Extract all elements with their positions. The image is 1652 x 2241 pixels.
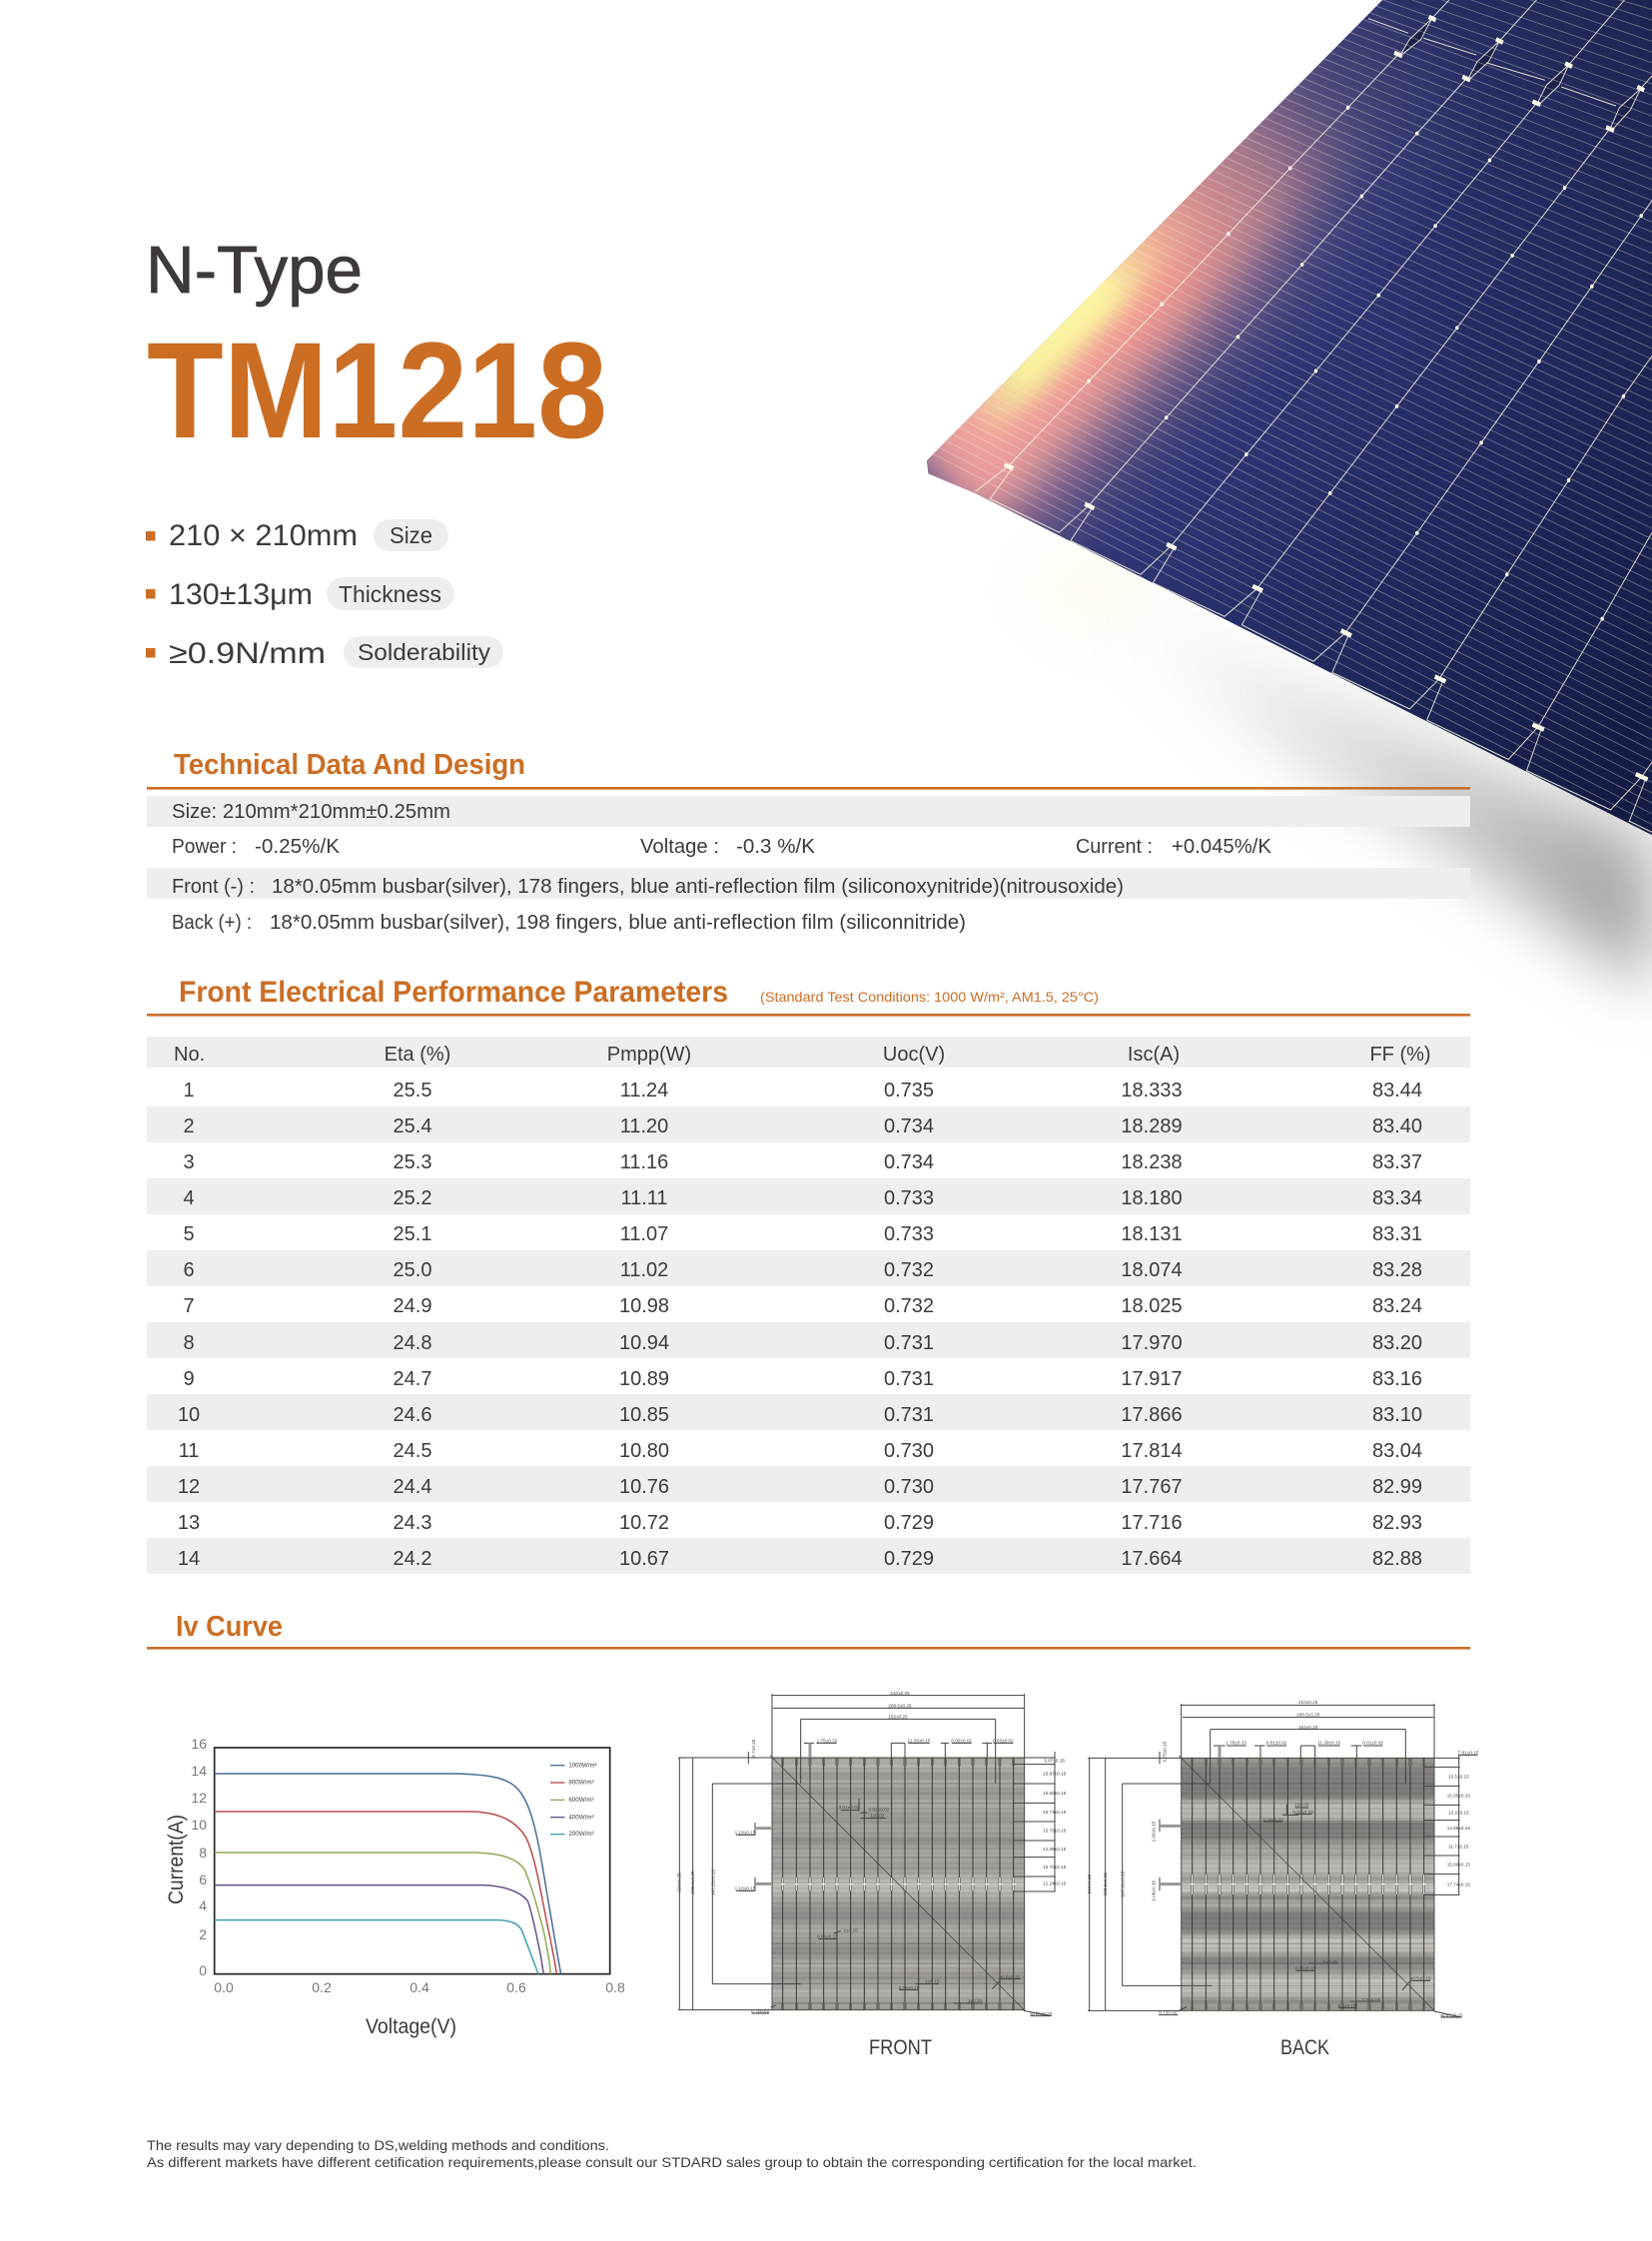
row 4: 0.733 [884, 1187, 934, 1209]
row 11: 10.80 [619, 1440, 669, 1462]
row 3: 3 [183, 1151, 195, 1173]
row 12: 17.767 [1121, 1476, 1183, 1498]
dimension labels: 12.24±0.15 [1043, 1881, 1067, 1886]
row 5: 25.1 [394, 1223, 431, 1245]
legend [550, 1762, 597, 1838]
row 14: 82.88 [1372, 1548, 1422, 1570]
dimension labels: 13.95±0.15 [1447, 1826, 1470, 1831]
row 12: 24.4 [394, 1476, 431, 1498]
row 11: 83.04 [1372, 1440, 1422, 1462]
table header: No. [174, 1044, 205, 1066]
row 13 [178, 1512, 1422, 1534]
dimension labels: 1±0.15 [968, 1998, 983, 2003]
dimension labels: 210±0.25 [890, 1691, 910, 1696]
row 6: 25.0 [394, 1259, 431, 1281]
dimension labels: 210±0.25 [1298, 1700, 1318, 1705]
row 10: 10 [178, 1404, 200, 1426]
dimension labels: 5.87±0.15 [1044, 1759, 1065, 1764]
dimension labels: 0.03±0.02 [993, 1738, 1014, 1743]
dimension labels: 147.25±0.25 [710, 1869, 715, 1895]
dimension labels: 0.02±0.02 [951, 1738, 972, 1743]
dimension labels: 0.04±0.02 [1262, 1817, 1283, 1822]
technical data rows [147, 796, 1470, 934]
dimension labels: 15.70±0.15 [1043, 1829, 1067, 1834]
dimension labels: 15.70±0.15 [1043, 1865, 1067, 1869]
table header: Eta (%) [385, 1044, 450, 1066]
row 12: 82.99 [1372, 1476, 1422, 1498]
row 3: 0.734 [884, 1151, 934, 1173]
dimension labels: 210±0.25 [1087, 1874, 1092, 1893]
y axis ticks: 8 [199, 1845, 207, 1861]
row 9: 83.16 [1372, 1368, 1422, 1390]
row 14: 17.664 [1121, 1548, 1183, 1570]
dimension labels: 3.01±0.02 [839, 1805, 860, 1810]
row 2: 0.734 [884, 1116, 934, 1137]
electrical parameters table [147, 1037, 1470, 1574]
row: size [147, 796, 1470, 827]
title: N-Type: N-Type [146, 233, 363, 308]
row: front: 18*0.05mm busbar(silver), 178 fingers, blue anti-reflection film (siliconoxynitride)(nitrousoxide) [272, 876, 1124, 898]
spec: thickness: Thickness [339, 581, 441, 607]
row: front [147, 868, 1470, 899]
row 9: 9 [183, 1368, 195, 1390]
row 9: 17.917 [1121, 1368, 1183, 1390]
row 5: 11.07 [620, 1223, 668, 1245]
table header: Isc(A) [1128, 1044, 1180, 1066]
table header: Uoc(V) [883, 1044, 945, 1066]
row 9: 24.7 [394, 1368, 431, 1390]
dimension labels: 1.76±0.15 [1226, 1741, 1246, 1746]
dimension labels: 0.7±0.25 [751, 1739, 756, 1758]
row 1 [183, 1080, 1422, 1102]
row: temperature coefficients: -0.25%/K [255, 836, 341, 858]
dimension labels: 208.6±0.25 [690, 1870, 695, 1894]
dimension labels: 0.03±0.02 [1292, 1810, 1313, 1815]
dimension labels: 12.2±0.15 [1448, 1810, 1469, 1815]
row 14: 14 [178, 1548, 200, 1570]
spec: solderability: Solderability [358, 639, 491, 665]
dimension labels: 15.60±0.15 [1043, 1791, 1067, 1796]
row: back: 18*0.05mm busbar(silver), 198 fingers, blue anti-reflection film (siliconnitride) [270, 912, 966, 934]
row 7: 83.24 [1372, 1295, 1422, 1317]
row 9: 10.89 [619, 1368, 669, 1390]
table header [174, 1044, 1431, 1066]
row 3: 83.37 [1372, 1151, 1422, 1173]
row 5: 0.733 [884, 1223, 934, 1245]
dimension labels: ø295±0.25 [1440, 2012, 1463, 2017]
y axis ticks: 4 [199, 1897, 207, 1913]
row: temperature coefficients: Power : [172, 836, 237, 858]
x axis ticks [214, 1979, 625, 1995]
section heading: iv curve: Iv Curve [176, 1611, 283, 1643]
legend: 200W/m² [568, 1831, 594, 1838]
row 7: 7 [183, 1295, 195, 1317]
row 6 [183, 1259, 1422, 1281]
row 3 [183, 1151, 1422, 1173]
row 11: 17.814 [1121, 1440, 1183, 1462]
dimension labels: 1.2±0.15 [1362, 1997, 1380, 2002]
row 8: 24.8 [394, 1332, 431, 1354]
dimension labels: ø295±0.25 [1030, 2011, 1053, 2016]
row 5: 83.31 [1372, 1223, 1422, 1245]
row 8 [183, 1332, 1422, 1354]
spec: solderability: ≥0.9N/mm [169, 637, 326, 670]
dimension lines [678, 1694, 1056, 2016]
row: back: Back (+) : [172, 912, 252, 934]
dimension labels: 167.23±0.25 [1120, 1870, 1125, 1897]
dimension labels: 1±0.15 [1323, 1959, 1337, 1964]
solar panel photo [879, 0, 1652, 989]
dimension labels: 1.18±0.15 [735, 1885, 756, 1890]
dimension labels: 1±0.15 [925, 1979, 940, 1984]
row 8: 10.94 [619, 1332, 669, 1354]
dimension labels: 0.7±0.02 [1159, 2010, 1178, 2015]
dimension lines [1088, 1704, 1477, 2017]
row: temperature coefficients: +0.045%/K [1172, 836, 1272, 858]
legend: 400W/m² [568, 1814, 594, 1821]
cell face [770, 1756, 1026, 2011]
row: temperature coefficients: Current : [1076, 836, 1153, 858]
row 9: 0.731 [884, 1368, 934, 1390]
legend: 1000W/m² [568, 1762, 597, 1769]
row 4: 4 [183, 1187, 195, 1209]
y axis ticks: 10 [191, 1817, 207, 1833]
y axis ticks: 12 [191, 1790, 207, 1806]
row 8: 0.731 [884, 1332, 934, 1354]
drawing: front dimensions [677, 1691, 1067, 2016]
dimension labels: 11.7±0.15 [1448, 1844, 1469, 1849]
row 13: 17.716 [1121, 1512, 1183, 1534]
dimension labels [677, 1691, 1067, 2016]
table header: Pmpp(W) [607, 1044, 691, 1066]
dimension labels: ø0.5±0.15 [1410, 1975, 1431, 1980]
footnote [147, 2137, 1197, 2170]
row 14: 24.2 [394, 1548, 431, 1570]
dimension labels: 0.81±0.02 [1266, 1741, 1287, 1746]
row 7: 0.732 [884, 1295, 934, 1317]
row 4: 11.11 [620, 1187, 668, 1209]
row 4: 18.180 [1121, 1187, 1183, 1209]
row 13: 82.93 [1372, 1512, 1422, 1534]
x axis ticks: 0.6 [506, 1979, 526, 1995]
label: front: FRONT [869, 2036, 932, 2059]
y axis ticks: 14 [191, 1763, 207, 1779]
row 14 [178, 1548, 1422, 1570]
title: TM1218: TM1218 [147, 315, 607, 467]
row 11: 11 [179, 1440, 199, 1462]
dimension labels [1087, 1700, 1479, 2017]
dimension labels: 208.5±0.25 [888, 1704, 912, 1709]
y axis ticks [191, 1736, 207, 1978]
row 8: 8 [183, 1332, 195, 1354]
row 12 [178, 1476, 1422, 1498]
row 7: 18.025 [1121, 1295, 1183, 1317]
dimension labels: 1.06±0.15 [1151, 1880, 1156, 1901]
row 10: 24.6 [394, 1404, 431, 1426]
row 2: 2 [183, 1116, 195, 1137]
row 13: 13 [178, 1512, 200, 1534]
dimension labels: 0.7±0.02 [751, 2008, 769, 2013]
row 4: 83.34 [1372, 1187, 1422, 1209]
row 1: 0.735 [884, 1080, 934, 1102]
row 2: 18.289 [1121, 1116, 1183, 1137]
dimension labels: 0.01±0.02 [1362, 1741, 1383, 1746]
row 7 [183, 1295, 1422, 1317]
row 3: 25.3 [394, 1151, 431, 1173]
section heading: electrical parameters: (Standard Test Conditions: 1000 W/m², AM1.5, 25°C) [760, 989, 1099, 1005]
legend: 800W/m² [568, 1780, 594, 1787]
axis title: current: Current(A) [165, 1815, 188, 1904]
dimension labels: 0.75±0.15 [1162, 1741, 1167, 1762]
x axis ticks: 0.0 [214, 1979, 234, 1995]
row 5: 5 [183, 1223, 195, 1245]
row 14: 10.67 [619, 1548, 669, 1570]
row 10: 0.731 [884, 1404, 934, 1426]
dimension labels: 1±0.15 [844, 1927, 858, 1932]
dimension labels: 0.06±0.15 [817, 1933, 838, 1938]
table header: FF (%) [1369, 1044, 1431, 1066]
row 2: 83.40 [1372, 1116, 1422, 1137]
dimension labels: 1.75±0.15 [817, 1738, 838, 1743]
row 12: 0.730 [884, 1476, 934, 1498]
row 7: 10.98 [619, 1295, 669, 1317]
y axis ticks: 2 [199, 1926, 207, 1942]
dimension labels: 15.5±0.15 [1448, 1774, 1469, 1779]
row 1: 1 [183, 1080, 195, 1102]
panel drop shadow [1024, 539, 1652, 989]
section heading: technical data: Technical Data And Design [174, 749, 525, 781]
x axis ticks: 0.2 [312, 1979, 332, 1995]
dimension labels: 15.00±0.15 [1447, 1863, 1470, 1868]
row 13: 0.729 [884, 1512, 934, 1534]
row 1: 83.44 [1372, 1080, 1422, 1102]
row 5: 18.131 [1121, 1223, 1183, 1245]
footnote: The results may vary depending to DS,welding methods and conditions. [147, 2137, 609, 2153]
row 6: 18.074 [1121, 1259, 1183, 1281]
spec: thickness: 130±13μm [169, 578, 313, 611]
footnote: As different markets have different cetification requirements,please consult our STDARD sales group to obtain the corresponding certification for the local market. [147, 2154, 1197, 2170]
dimension labels: 208.5±0.25 [1296, 1712, 1320, 1717]
row 11 [179, 1440, 1422, 1462]
dimension labels: 11.29±0.15 [1317, 1741, 1341, 1746]
row 6: 0.732 [884, 1259, 934, 1281]
chart: IV curve [165, 1736, 625, 2038]
dimension labels: 15.73±0.15 [1043, 1810, 1067, 1815]
dimension labels: 162±0.25 [888, 1715, 908, 1720]
y axis ticks: 6 [199, 1871, 207, 1887]
dimension labels: 14.09±0.15 [1043, 1847, 1067, 1852]
dimension labels: 11.29±0.15 [908, 1738, 931, 1743]
row 3: 18.238 [1121, 1151, 1183, 1173]
row 10: 17.866 [1121, 1404, 1183, 1426]
row 2: 11.20 [620, 1116, 668, 1137]
label: back: BACK [1280, 2036, 1329, 2059]
legend: 600W/m² [568, 1797, 594, 1804]
row 11: 0.730 [884, 1440, 934, 1462]
row 2: 25.4 [394, 1116, 431, 1137]
row 8: 17.970 [1121, 1332, 1183, 1354]
row 5 [183, 1223, 1422, 1245]
x axis ticks: 0.4 [410, 1979, 429, 1995]
row 4 [183, 1187, 1422, 1209]
axis title: voltage: Voltage(V) [366, 2015, 456, 2038]
row 10 [178, 1404, 1422, 1426]
dimension labels: 15.97±0.15 [1043, 1772, 1067, 1777]
row 2 [183, 1116, 1422, 1137]
cell face [1179, 1756, 1435, 2012]
row 6: 83.28 [1372, 1259, 1422, 1281]
row 13: 10.72 [619, 1512, 669, 1534]
plot area and curves [215, 1748, 610, 1974]
row 6: 6 [183, 1259, 195, 1281]
spec list [146, 519, 503, 670]
dimension labels: 17.74±0.15 [1447, 1881, 1470, 1886]
row 4: 25.2 [394, 1187, 431, 1209]
row 3: 11.16 [620, 1151, 668, 1173]
y axis ticks: 16 [191, 1736, 207, 1752]
row 1: 25.5 [394, 1080, 431, 1102]
dimension labels: 1.06±0.15 [1151, 1821, 1156, 1842]
dimension labels: 0.08±0.15 [899, 1985, 920, 1990]
y axis ticks: 0 [199, 1962, 207, 1978]
row 1: 11.24 [620, 1080, 668, 1102]
row: temperature coefficients: Voltage : [640, 836, 719, 858]
row 10: 83.10 [1372, 1404, 1422, 1426]
dimension labels: 210±0.25 [677, 1872, 682, 1892]
row 1: 18.333 [1121, 1080, 1183, 1102]
dimension labels: 1±0.02 [870, 1813, 885, 1818]
row 12: 12 [178, 1476, 200, 1498]
spec: size [146, 519, 448, 552]
row 9 [183, 1368, 1422, 1390]
row 10: 10.85 [619, 1404, 669, 1426]
row 7: 24.9 [394, 1295, 431, 1317]
row 8: 83.20 [1372, 1332, 1422, 1354]
dimension labels: 0.6±0.15 [1338, 2003, 1356, 2008]
spec: solderability [146, 636, 503, 670]
panel surface [927, 0, 1652, 835]
dimension labels: 1.18±0.15 [735, 1830, 756, 1835]
row 14: 0.729 [884, 1548, 934, 1570]
section heading: electrical parameters: Front Electrical Performance Parameters [179, 976, 728, 1009]
dimension labels: 1±0.02 [1294, 1803, 1309, 1808]
x axis ticks: 0.8 [605, 1979, 625, 1995]
dimension labels: ø0.5±0.15 [999, 1974, 1021, 1979]
table stripes [147, 1037, 1470, 1574]
section heading: electrical parameters [147, 976, 1470, 1017]
row 12: 10.76 [619, 1476, 669, 1498]
spec: thickness [146, 577, 454, 611]
dimension labels: 0.02±0.02 [869, 1807, 890, 1812]
dimension labels: 0.08±0.15 [1295, 1965, 1316, 1970]
dimension labels: 162±0.25 [1298, 1725, 1318, 1730]
row 13: 24.3 [394, 1512, 431, 1534]
row 11: 24.5 [394, 1440, 431, 1462]
row: size: Size: 210mm*210mm±0.25mm [172, 801, 450, 823]
drawing: back dimensions [1087, 1700, 1479, 2017]
spec: size: Size [390, 522, 432, 548]
dimension labels: 7.81±0.15 [1458, 1750, 1479, 1755]
dimension labels: 208.5±0.25 [1103, 1872, 1108, 1895]
row 6: 11.02 [620, 1259, 668, 1281]
row: temperature coefficients [172, 836, 1272, 858]
spec: size: 210 × 210mm [169, 519, 358, 552]
row: temperature coefficients: -0.3 %/K [736, 836, 816, 858]
dimension labels: 15.95±0.15 [1447, 1793, 1470, 1798]
row: front: Front (-) : [172, 876, 255, 898]
